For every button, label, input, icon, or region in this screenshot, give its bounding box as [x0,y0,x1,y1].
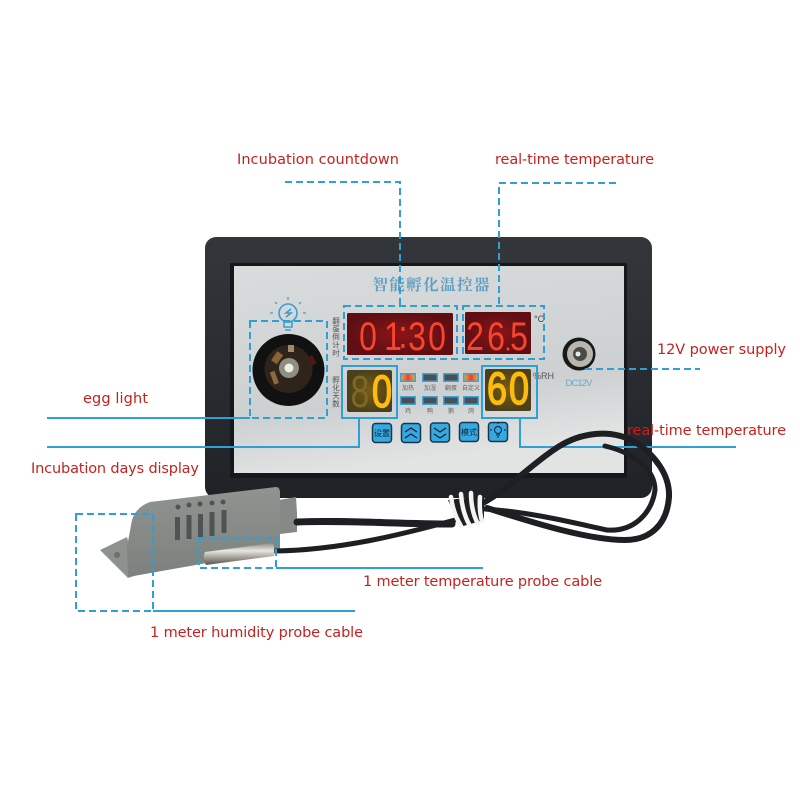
probe flange [100,537,137,578]
indicator labels: 鸡 [405,407,411,415]
RH unit: %RH [533,371,554,381]
button: up [402,424,420,442]
humidity display: 0 [509,363,529,414]
indicator lights [400,373,479,405]
cables [275,434,669,551]
bezel [205,237,652,498]
countdown display: : [399,312,407,357]
LED [279,358,299,378]
label: incubation days: Incubation days display [31,461,199,477]
icon: bulb [270,297,306,330]
panel title: 智能孵化温控器 [372,273,490,295]
knot core [448,496,484,527]
temperature display: 6 [487,314,505,359]
days display: 8 [351,367,369,417]
indicator labels: 鸽 [468,407,474,415]
egg light [252,334,324,406]
temperature display: 2 [466,314,484,359]
probe connector [279,497,297,534]
indicator labels: 鹅 [448,407,454,415]
indicator labels: 加热 [402,384,414,392]
indicator labels: 鸭 [427,407,433,415]
label: real-time temperature top: real-time temperature [495,152,654,168]
power jack [562,338,596,370]
humidity display: 6 [487,363,507,414]
button: down [430,423,450,442]
label: incubation countdown: Incubation countdown [237,152,399,168]
decimal point [506,348,510,350]
indicator labels: 翻蛋 [445,384,457,392]
temperature display: 5 [510,314,528,359]
label: egg light: egg light [83,391,148,407]
humidity probe [100,487,297,578]
indicator labels: 加湿 [424,384,436,392]
celsius unit: °C [534,314,545,324]
indicator labels: 自定义 [462,384,480,392]
probe body [127,487,280,577]
countdown display: 0 [359,314,377,359]
steel temperature probe [204,543,274,565]
inner frame [230,263,627,478]
cable tie [448,493,484,527]
probe callouts [76,514,483,611]
countdown display: 1 [384,314,402,359]
DC12V label: DC12V [566,378,593,389]
callout lines [47,182,736,447]
button: mode: 模式 [461,427,477,437]
button: light [488,422,508,442]
front panel [234,266,624,473]
lamp socket [252,334,324,406]
countdown display: 0 [428,314,446,359]
humidity display [485,363,531,414]
indicator labels [402,384,480,415]
cable: humidity lead [297,521,452,524]
label: temperature probe: 1 meter temperature probe cable [363,574,602,590]
label: power supply: 12V power supply [657,342,786,358]
countdown display [347,312,453,359]
days display: 0 [372,366,392,417]
probe vents [175,500,226,540]
days display [347,366,392,417]
controller housing [205,237,652,498]
label: humidity probe: 1 meter humidity probe cable [150,625,363,641]
button: set: 设置 [374,428,390,438]
buttons [372,422,508,442]
temperature display [465,312,531,359]
cable: outer loop [483,434,669,540]
vertical label: incubation days: 孵化天数 [331,375,340,409]
cable: temperature lead [275,520,455,551]
cable: inner loop [485,446,655,530]
label: real-time temperature right: real-time temperature [627,423,786,439]
vertical label: turning countdown: 翻蛋倒计时 [331,317,340,357]
countdown display: 3 [408,314,426,359]
